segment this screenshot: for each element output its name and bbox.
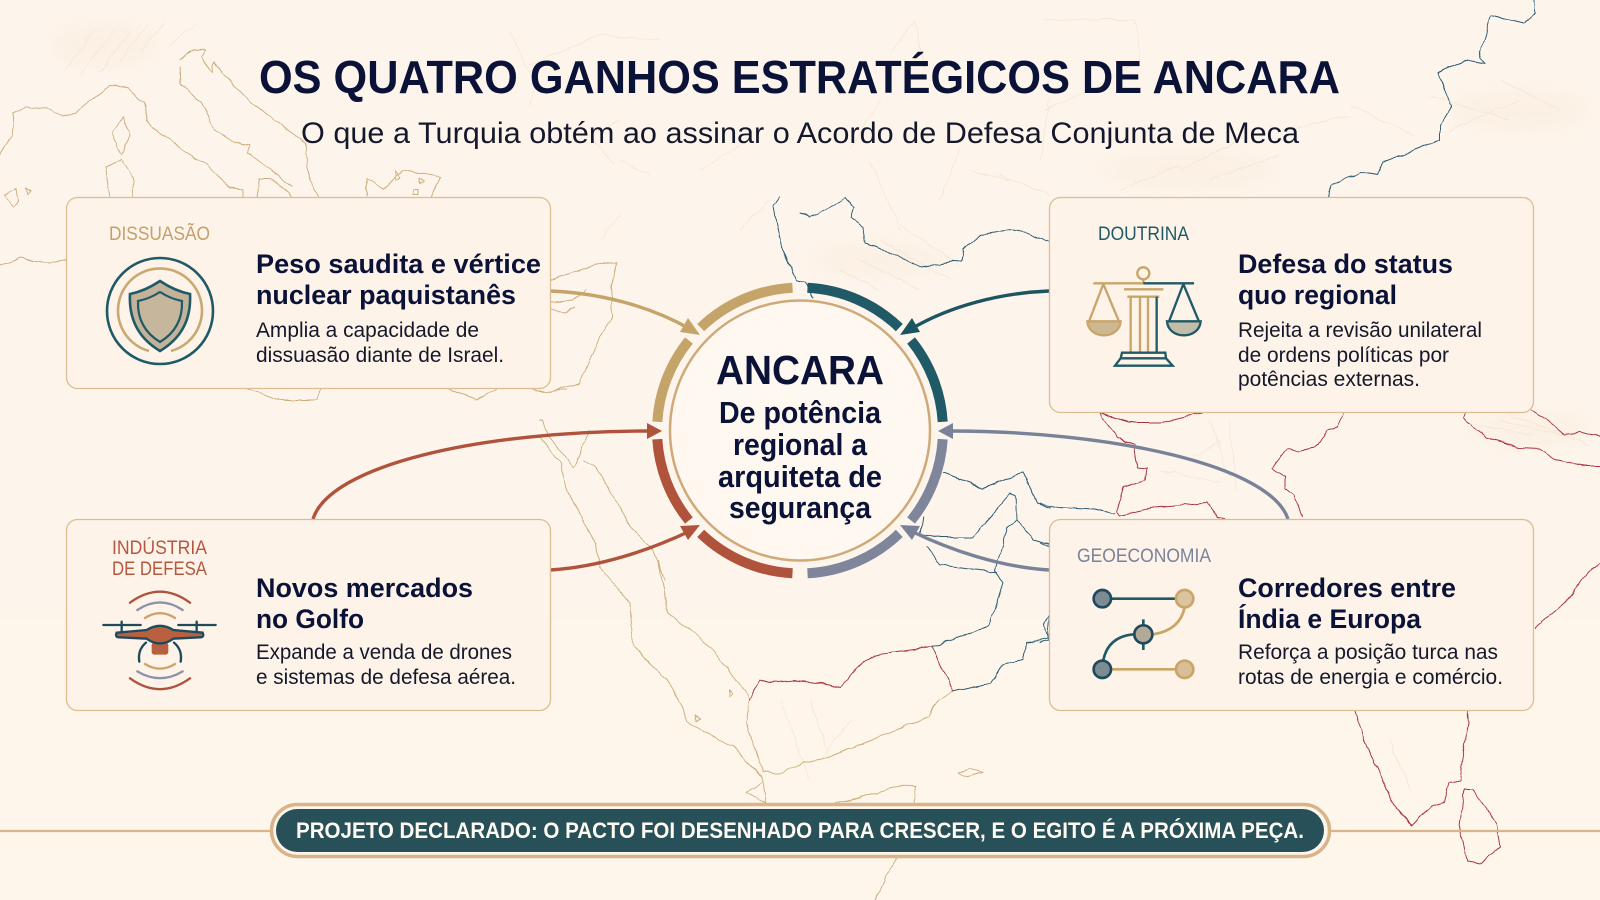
hub text xyxy=(718,395,882,525)
hub text: arquiteta de xyxy=(718,459,882,494)
map: coasts of Europe and Arabia xyxy=(0,49,983,900)
title: OS QUATRO GANHOS ESTRATÉGICOS DE ANCARA xyxy=(259,51,1340,103)
card heading: nuclear paquistanês xyxy=(256,280,516,310)
icon: corridors network xyxy=(1094,590,1193,678)
card text xyxy=(256,641,516,689)
hub text: regional a xyxy=(733,427,868,462)
panel: dissuasão xyxy=(66,198,550,388)
card text: e sistemas de defesa aérea. xyxy=(256,666,516,689)
icon: scales and column xyxy=(1087,267,1201,366)
card heading: Peso saudita e vértice xyxy=(256,249,541,279)
map: Gulf and Iranian borders xyxy=(773,0,1535,692)
label: indústria de defesa: DE DEFESA xyxy=(112,559,207,580)
card heading xyxy=(256,573,473,634)
card heading: Defesa do status xyxy=(1238,249,1453,279)
hub heading: ANCARA xyxy=(716,347,884,393)
arrow: geoeconomia lower to centre xyxy=(900,525,1049,570)
label: dissuasão: DISSUASÃO xyxy=(109,223,210,245)
banner text: PROJETO DECLARADO: O PACTO FOI DESENHADO PARA CRESCER, E O EGITO É A PRÓXIMA PEÇA. xyxy=(296,818,1304,843)
card text: Reforça a posição turca nas xyxy=(1238,641,1498,664)
arrow: dissuasão to centre xyxy=(550,291,700,335)
card heading xyxy=(256,249,541,310)
card heading: Índia e Europa xyxy=(1238,603,1422,634)
card text: Amplia a capacidade de xyxy=(256,319,479,342)
card heading xyxy=(1238,249,1453,310)
card text: dissuasão diante de Israel. xyxy=(256,344,504,367)
card text xyxy=(1238,641,1503,689)
banner xyxy=(0,804,1600,856)
map: eastern borders and India xyxy=(749,410,1600,864)
arrow: indústria de defesa upper to centre xyxy=(313,423,662,519)
label: geoeconomia: GEOECONOMIA xyxy=(1077,546,1211,567)
panel: geoeconomia xyxy=(1050,520,1534,710)
subtitle: O que a Turquia obtém ao assinar o Acordo de Defesa Conjunta de Meca xyxy=(301,117,1299,150)
hub text: segurança xyxy=(729,490,872,525)
card heading xyxy=(1238,573,1456,634)
card text: rotas de energia e comércio. xyxy=(1238,666,1503,689)
arrow: geoeconomia upper to centre xyxy=(938,423,1288,519)
label: indústria de defesa: INDÚSTRIA xyxy=(112,537,207,559)
arrow: indústria de defesa lower to centre xyxy=(550,525,700,570)
card heading: Corredores entre xyxy=(1238,573,1456,603)
card heading: no Golfo xyxy=(256,604,364,634)
label: doutrina: DOUTRINA xyxy=(1098,224,1189,245)
card text: potências externas. xyxy=(1238,368,1420,391)
icon: shield xyxy=(107,258,213,364)
card text xyxy=(1238,319,1482,391)
central hub xyxy=(657,288,943,573)
card text: Rejeita a revisão unilateral xyxy=(1238,319,1482,342)
card text: Expande a venda de drones xyxy=(256,641,512,664)
card text: de ordens políticas por xyxy=(1238,344,1449,367)
arrow: doutrina to centre xyxy=(900,291,1049,335)
panel: indústria de defesa xyxy=(66,520,550,710)
hub inner circle xyxy=(670,300,930,560)
icon: drone xyxy=(103,592,216,689)
card text xyxy=(256,319,504,367)
panel: doutrina xyxy=(1050,198,1534,412)
card heading: Novos mercados xyxy=(256,573,473,603)
hub segmented ring xyxy=(657,288,943,573)
label: indústria de defesa xyxy=(112,537,207,580)
card heading: quo regional xyxy=(1238,280,1397,310)
hub text: De potência xyxy=(719,395,882,430)
